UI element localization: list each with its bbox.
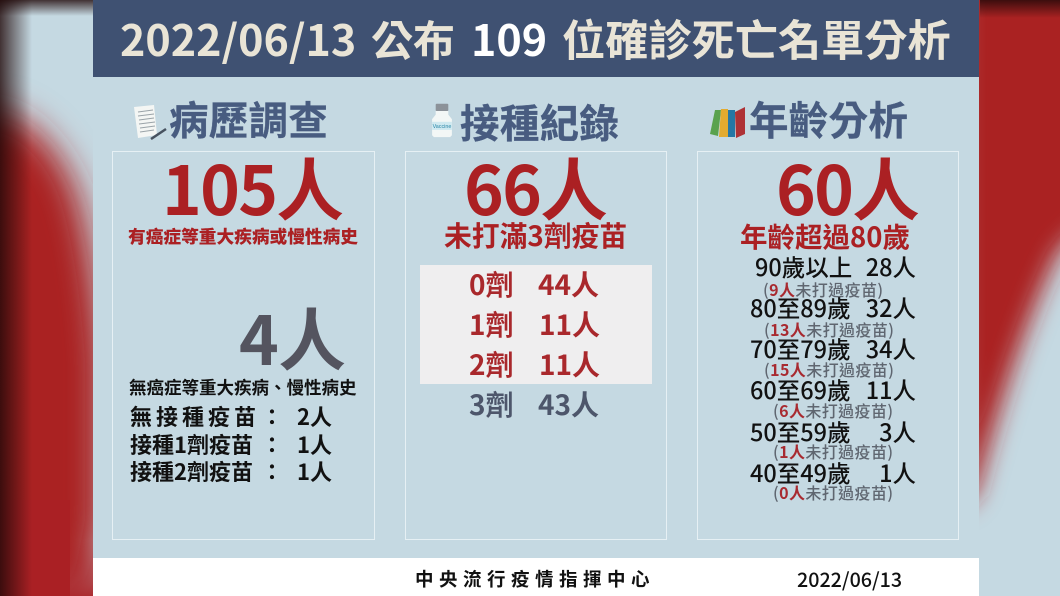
- dose 0: 0劑: [469, 264, 514, 304]
- panel: medical history: [112, 90, 375, 540]
- row 90+ note: (9人未打過疫苗): [763, 277, 883, 301]
- footer date: 2022/06/13: [797, 564, 902, 593]
- label dose 2: 接種2劑疫苗: [130, 455, 253, 487]
- panel: age analysis: [697, 90, 959, 540]
- box: [405, 151, 667, 540]
- value 1: 1人: [297, 428, 332, 460]
- stat label: 未打滿3劑疫苗: [444, 215, 627, 255]
- highlight band: [420, 265, 652, 384]
- main panel: [93, 77, 979, 558]
- dose 3 count: 43人: [538, 384, 599, 424]
- stat label: 年齡超過80歲: [740, 215, 910, 255]
- row 60-69 note: (6人未打過疫苗): [773, 398, 893, 422]
- dose 2 count: 11人: [539, 344, 600, 384]
- row 40-49 note: (0人未打過疫苗): [773, 480, 893, 504]
- title bar: [93, 0, 979, 77]
- dose 1 count: 11人: [539, 304, 600, 344]
- row 40-49: 40至49歲: [750, 455, 851, 489]
- box: [112, 151, 375, 540]
- icon: books: [710, 107, 745, 138]
- panel: vaccination: [405, 93, 667, 540]
- colon: ：: [261, 455, 283, 487]
- value 1: 1人: [297, 455, 332, 487]
- icon: vaccine bottle: Vaccine: [433, 124, 451, 130]
- row: no vaccine: [130, 400, 332, 487]
- row 60-69 count: 11人: [866, 372, 916, 406]
- row 50-59: 50至59歲: [750, 414, 851, 448]
- row 70-79 count: 34人: [866, 331, 916, 365]
- stat: 60: 60人: [776, 138, 918, 235]
- colon: ：: [261, 400, 283, 432]
- row 60-69: 60至69歲: [750, 372, 851, 406]
- stat label 2: 無癌症等重大疾病、慢性病史: [129, 375, 356, 400]
- stat label: 有癌症等重大疾病或慢性病史: [128, 223, 358, 249]
- stat: 4: 4人: [239, 288, 345, 385]
- footer source: 中央流行疫情指揮中心: [415, 566, 655, 592]
- row 50-59 note: (1人未打過疫苗): [773, 439, 893, 463]
- row 40-49 count: 1人: [879, 455, 916, 489]
- heading: 接種紀錄: [460, 93, 619, 150]
- dose 0 count: 44人: [538, 264, 599, 304]
- label no vaccine: 無接種疫苗: [130, 400, 260, 432]
- row 70-79 note: (15人未打過疫苗): [764, 357, 894, 381]
- title date: 2022/06/13: [120, 7, 356, 69]
- row 70-79: 70至79歲: [750, 331, 851, 365]
- dose 1: 1劑: [469, 304, 514, 344]
- dose 3: 3劑: [469, 384, 514, 424]
- row 50-59 count: 3人: [879, 414, 916, 448]
- row 80-89 note: (13人未打過疫苗): [764, 317, 894, 341]
- value 2: 2人: [297, 400, 332, 432]
- row 90+ count: 28人: [866, 249, 916, 283]
- heading: 病歷調查: [169, 90, 328, 147]
- row 80-89 count: 32人: [866, 290, 916, 324]
- row 80-89: 80至89歲: [750, 290, 851, 324]
- title rest: 位確診死亡名單分析: [562, 7, 951, 69]
- heading: 年齡分析: [749, 90, 908, 147]
- title number: 109: [471, 7, 547, 69]
- row 90+: 90歲以上: [755, 249, 852, 283]
- title verb: 公布: [371, 8, 455, 69]
- footer: [93, 558, 979, 596]
- colon: ：: [261, 428, 283, 460]
- stat: 105: 105人: [162, 138, 342, 235]
- icon: document and pen: [134, 105, 167, 140]
- icon: vaccine bottle: [432, 104, 452, 138]
- age rows: [750, 249, 916, 504]
- label dose 1: 接種1劑疫苗: [130, 428, 253, 460]
- stat: 66: 66人: [464, 138, 606, 235]
- dose 2: 2劑: [469, 344, 514, 384]
- box: [697, 151, 959, 540]
